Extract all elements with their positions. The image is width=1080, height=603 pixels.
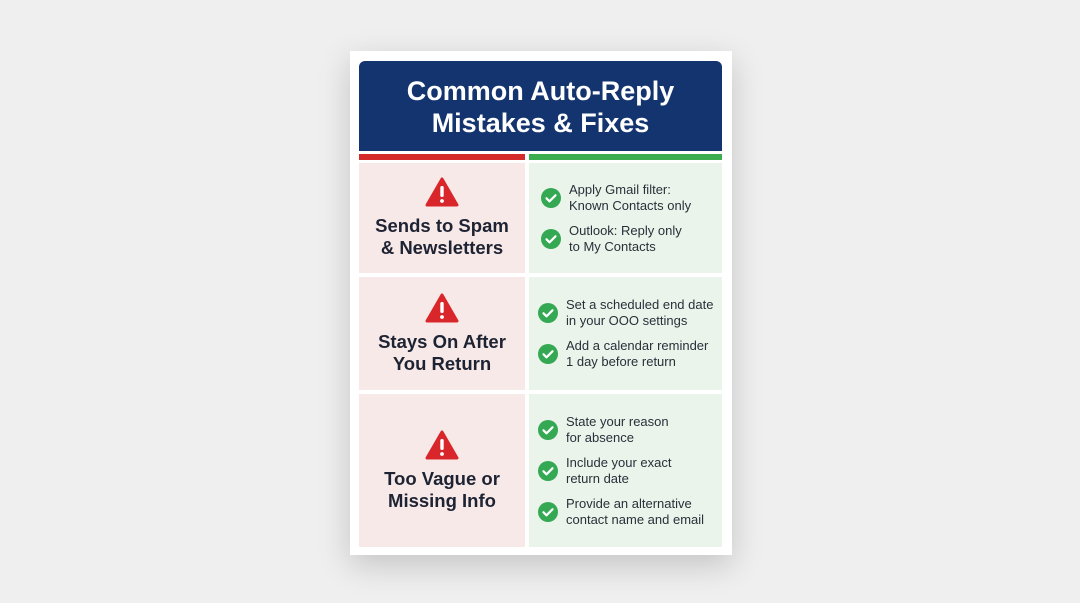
row 2 fixes: 1 day before return xyxy=(566,354,676,369)
row 1 mistake xyxy=(359,163,525,273)
row 3 fixes: State your reason xyxy=(566,414,669,428)
row 3 mistake xyxy=(359,394,525,547)
row 2 fixes: Set a scheduled end date xyxy=(566,297,713,312)
row 2 fixes: Add a calendar reminder xyxy=(566,338,708,353)
row 1 fixes: Known Contacts only xyxy=(569,198,691,212)
row 2 fixes: in your OOO settings xyxy=(566,313,687,328)
title: Common Auto-Reply xyxy=(407,76,674,106)
row 1 mistake: & Newsletters xyxy=(381,237,503,258)
row 3 fixes: for absence xyxy=(566,430,634,444)
icon: warning xyxy=(426,293,459,322)
row 2 fixes xyxy=(529,277,722,390)
row 3 mistake: Too Vague or xyxy=(384,468,500,488)
icon: warning xyxy=(426,430,459,460)
red bar xyxy=(359,154,525,160)
row 3 fixes xyxy=(529,394,722,547)
row 1 fixes: to My Contacts xyxy=(569,238,656,254)
row 1 mistake: Sends to Spam xyxy=(375,215,509,236)
green bar xyxy=(529,154,722,160)
row 1 fixes: Apply Gmail filter: xyxy=(569,182,671,196)
row 2 mistake: Stays On After xyxy=(378,330,506,352)
row 1 fixes xyxy=(529,163,722,273)
row 2 mistake: You Return xyxy=(393,352,491,374)
row 3 mistake: Missing Info xyxy=(388,490,496,510)
icon: warning xyxy=(426,177,459,206)
card xyxy=(350,51,732,555)
title: Mistakes & Fixes xyxy=(432,108,649,138)
row 2 mistake xyxy=(359,277,525,390)
row 3 fixes: Provide an alternative xyxy=(566,496,692,510)
title xyxy=(359,61,722,151)
row 3 fixes: return date xyxy=(566,470,629,486)
row 3 fixes: contact name and email xyxy=(566,512,704,526)
row 3 fixes: Include your exact xyxy=(566,454,672,470)
row 1 fixes: Outlook: Reply only xyxy=(569,222,682,238)
